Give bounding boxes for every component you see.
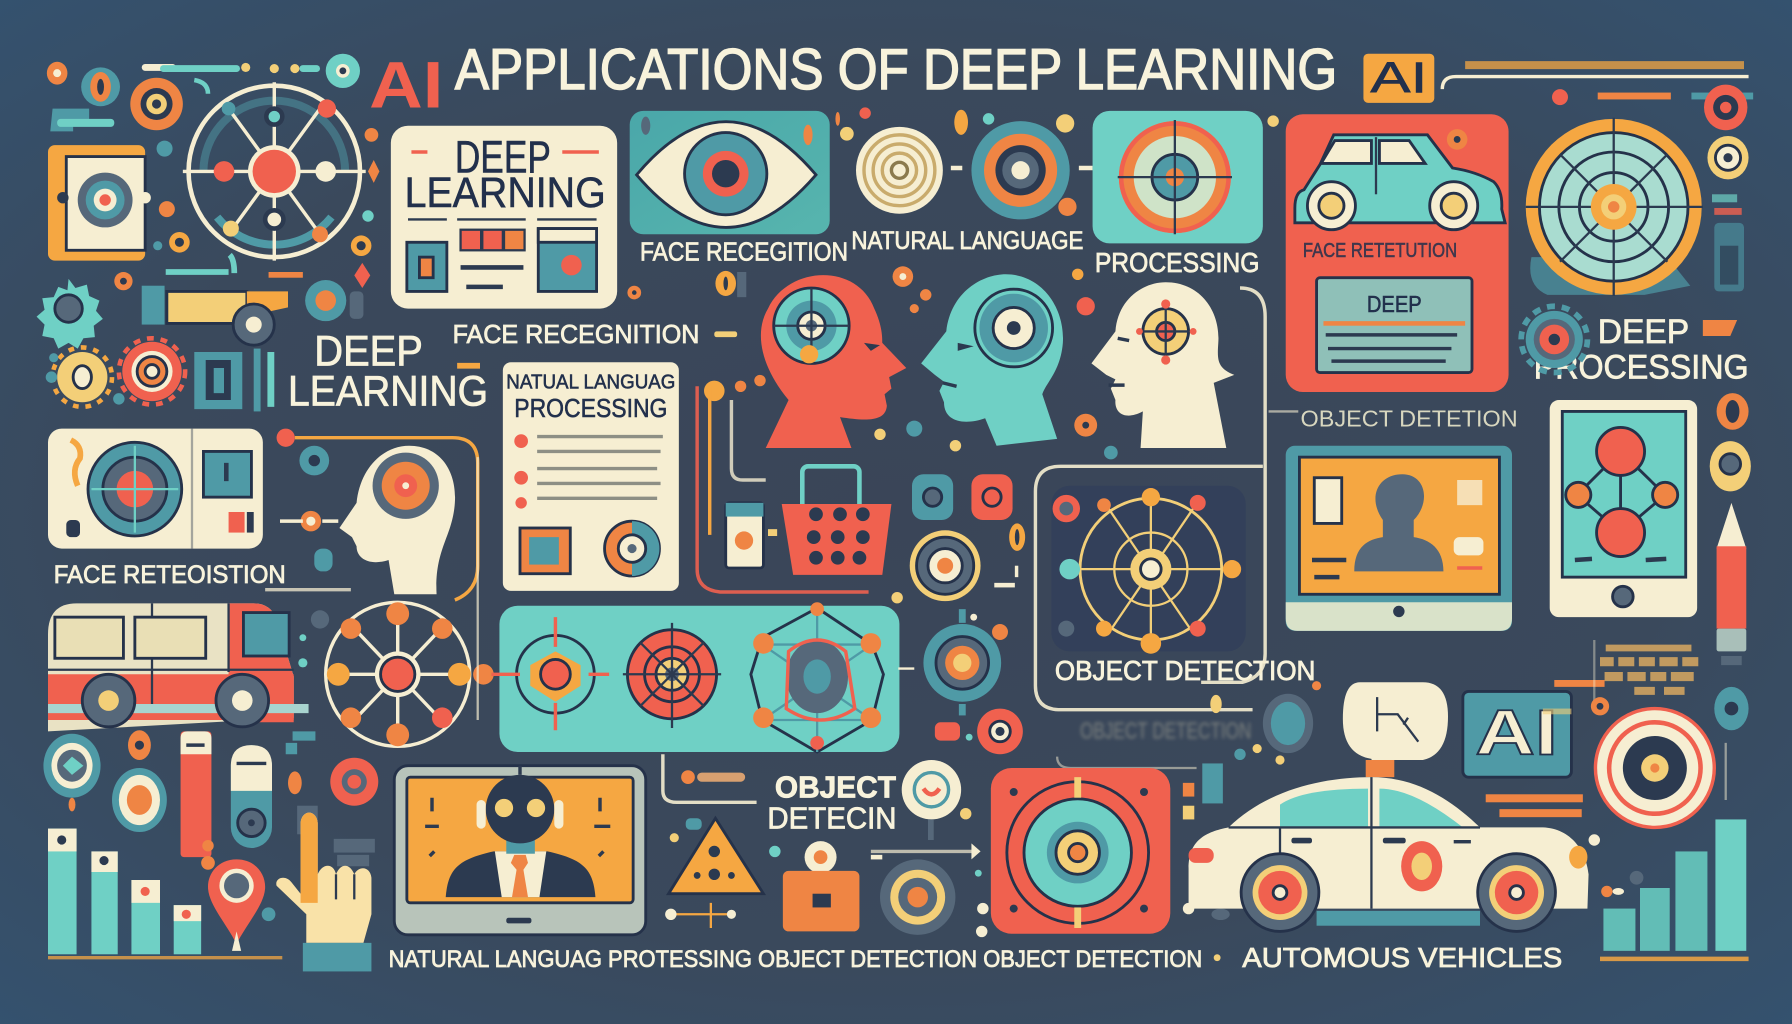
orange mosaic — [1543, 640, 1698, 714]
icon: connector + object label — [663, 754, 897, 836]
label: deep learning: LEARNING — [288, 368, 488, 415]
icon: teal gear — [37, 279, 103, 349]
icon: framed gear card — [48, 145, 151, 261]
icon: teal target right of panel — [898, 609, 1001, 715]
icon: bottom target + ring — [871, 760, 989, 937]
icon: monitor with robot presenter — [394, 766, 646, 935]
icon: blue document — [194, 349, 274, 411]
bar chart: bottom right — [1600, 819, 1749, 959]
label: natural language: NATURAL LANGUAGE — [851, 227, 1083, 255]
gear + label: deep processing — [1521, 306, 1749, 386]
card: deep learning: DEEP — [455, 132, 551, 183]
panel: object detection network — [1035, 466, 1263, 710]
icon: coral web — [623, 623, 721, 728]
icon: monitor with person — [1286, 446, 1512, 631]
icon: teal car — [1295, 129, 1505, 230]
icons: small rings centre — [935, 709, 1023, 754]
icon: connector + object label: DETECIN — [767, 801, 897, 836]
card: nlp document: NATUAL LANGUAG — [506, 371, 675, 394]
connector: monitor frame — [1201, 288, 1265, 682]
label: face recegnition: FACE RECEGNITION — [453, 319, 699, 349]
icon: pointing hand — [276, 813, 371, 971]
card: coral target — [991, 768, 1170, 934]
icon: cream head with brain — [280, 446, 455, 594]
icon: coral head — [761, 275, 906, 448]
small dots around heads — [457, 266, 1118, 459]
connector lines: top right — [1442, 65, 1753, 105]
icon: target bottom right — [1591, 687, 1749, 827]
icon: hex node — [491, 617, 609, 730]
icon: network — [326, 457, 494, 746]
title — [369, 38, 1337, 122]
faded label and ring — [1057, 681, 1321, 768]
small icon cards — [891, 474, 1025, 640]
title: APPLICATIONS OF DEEP LEARNING — [455, 38, 1337, 102]
card: nlp document — [503, 362, 679, 591]
connectors and phone icon — [697, 386, 869, 592]
panel: coral car card — [1286, 114, 1509, 392]
icon: cream head — [1091, 282, 1234, 448]
icon: pencil — [1717, 503, 1746, 665]
icon: connector + object label: OBJECT — [775, 770, 896, 805]
label: face reteoistion: FACE RETEOISTION — [54, 561, 286, 589]
card: eye — [630, 111, 830, 234]
icon cluster: top left — [47, 54, 360, 131]
small bits near police car — [1183, 744, 1600, 920]
icon: big radar target — [1526, 118, 1703, 296]
icon: fingerprint — [835, 107, 943, 214]
card: deep learning — [391, 126, 617, 309]
icon: teal head — [921, 274, 1063, 446]
label: deep learning — [288, 328, 488, 415]
card: processing target — [1093, 111, 1279, 243]
small dots: left column — [114, 128, 378, 290]
icon: yellow gear — [46, 347, 125, 407]
icon: small truck — [142, 255, 363, 345]
gear + label: deep processing: PROCESSING — [1534, 348, 1749, 386]
bars left — [48, 829, 282, 958]
label: object detection: OBJECT DETECTION — [1055, 655, 1315, 686]
icons: top-right rings — [1704, 85, 1749, 291]
title: AI — [369, 48, 443, 122]
icon: shopping basket — [782, 466, 891, 575]
icon: padlock — [783, 841, 882, 931]
icon: coral gear — [119, 338, 185, 405]
icon: small rings right — [1710, 393, 1751, 491]
connector: orange line to head — [277, 429, 478, 600]
van — [48, 603, 329, 731]
label: deep learning: DEEP — [314, 328, 423, 375]
label: autonomous vehicles: AUTOMOUS VEHICLES — [1242, 942, 1562, 973]
icon: central network wheel — [183, 82, 379, 261]
badge: blue AI — [1463, 691, 1571, 777]
panel: face card bottom left — [48, 429, 263, 549]
card: deep learning: LEARNING — [405, 169, 606, 216]
card: nlp document: PROCESSING — [514, 393, 667, 423]
text box: deep: DEEP — [1367, 291, 1422, 317]
icon: police car — [1189, 760, 1589, 931]
icon: target — [951, 110, 1093, 219]
badge: blue AI: AI — [1475, 696, 1558, 768]
label: object detetion: OBJECT DETETION — [1301, 405, 1518, 431]
gear + label: deep processing: DEEP — [1598, 313, 1689, 351]
icons: rings and capsules — [43, 730, 378, 883]
panel: teal neural icons — [491, 602, 899, 752]
text box: deep — [1317, 278, 1472, 373]
faded label and ring: OBJECT DETECTION — [1080, 717, 1251, 743]
icon: tablet — [1550, 400, 1697, 617]
icon: gears left — [37, 279, 274, 411]
icon: warning triangle — [665, 818, 781, 928]
label: processing: PROCESSING — [1095, 247, 1259, 278]
label: face recegition: FACE RECEGITION — [640, 237, 848, 267]
speech bubble — [1343, 682, 1448, 771]
icon: geodesic sphere — [751, 602, 883, 752]
badge: AI: AI — [1370, 55, 1427, 103]
panel: coral car card: FACE RETETUTION — [1303, 239, 1457, 262]
label: bottom natural language and object detection: NATURAL LANGUAG PROTESSING OBJECT DETECTION OBJECT DETECTION — [389, 946, 1202, 973]
icon: map pin — [208, 859, 275, 951]
badge: AI — [1363, 54, 1434, 103]
